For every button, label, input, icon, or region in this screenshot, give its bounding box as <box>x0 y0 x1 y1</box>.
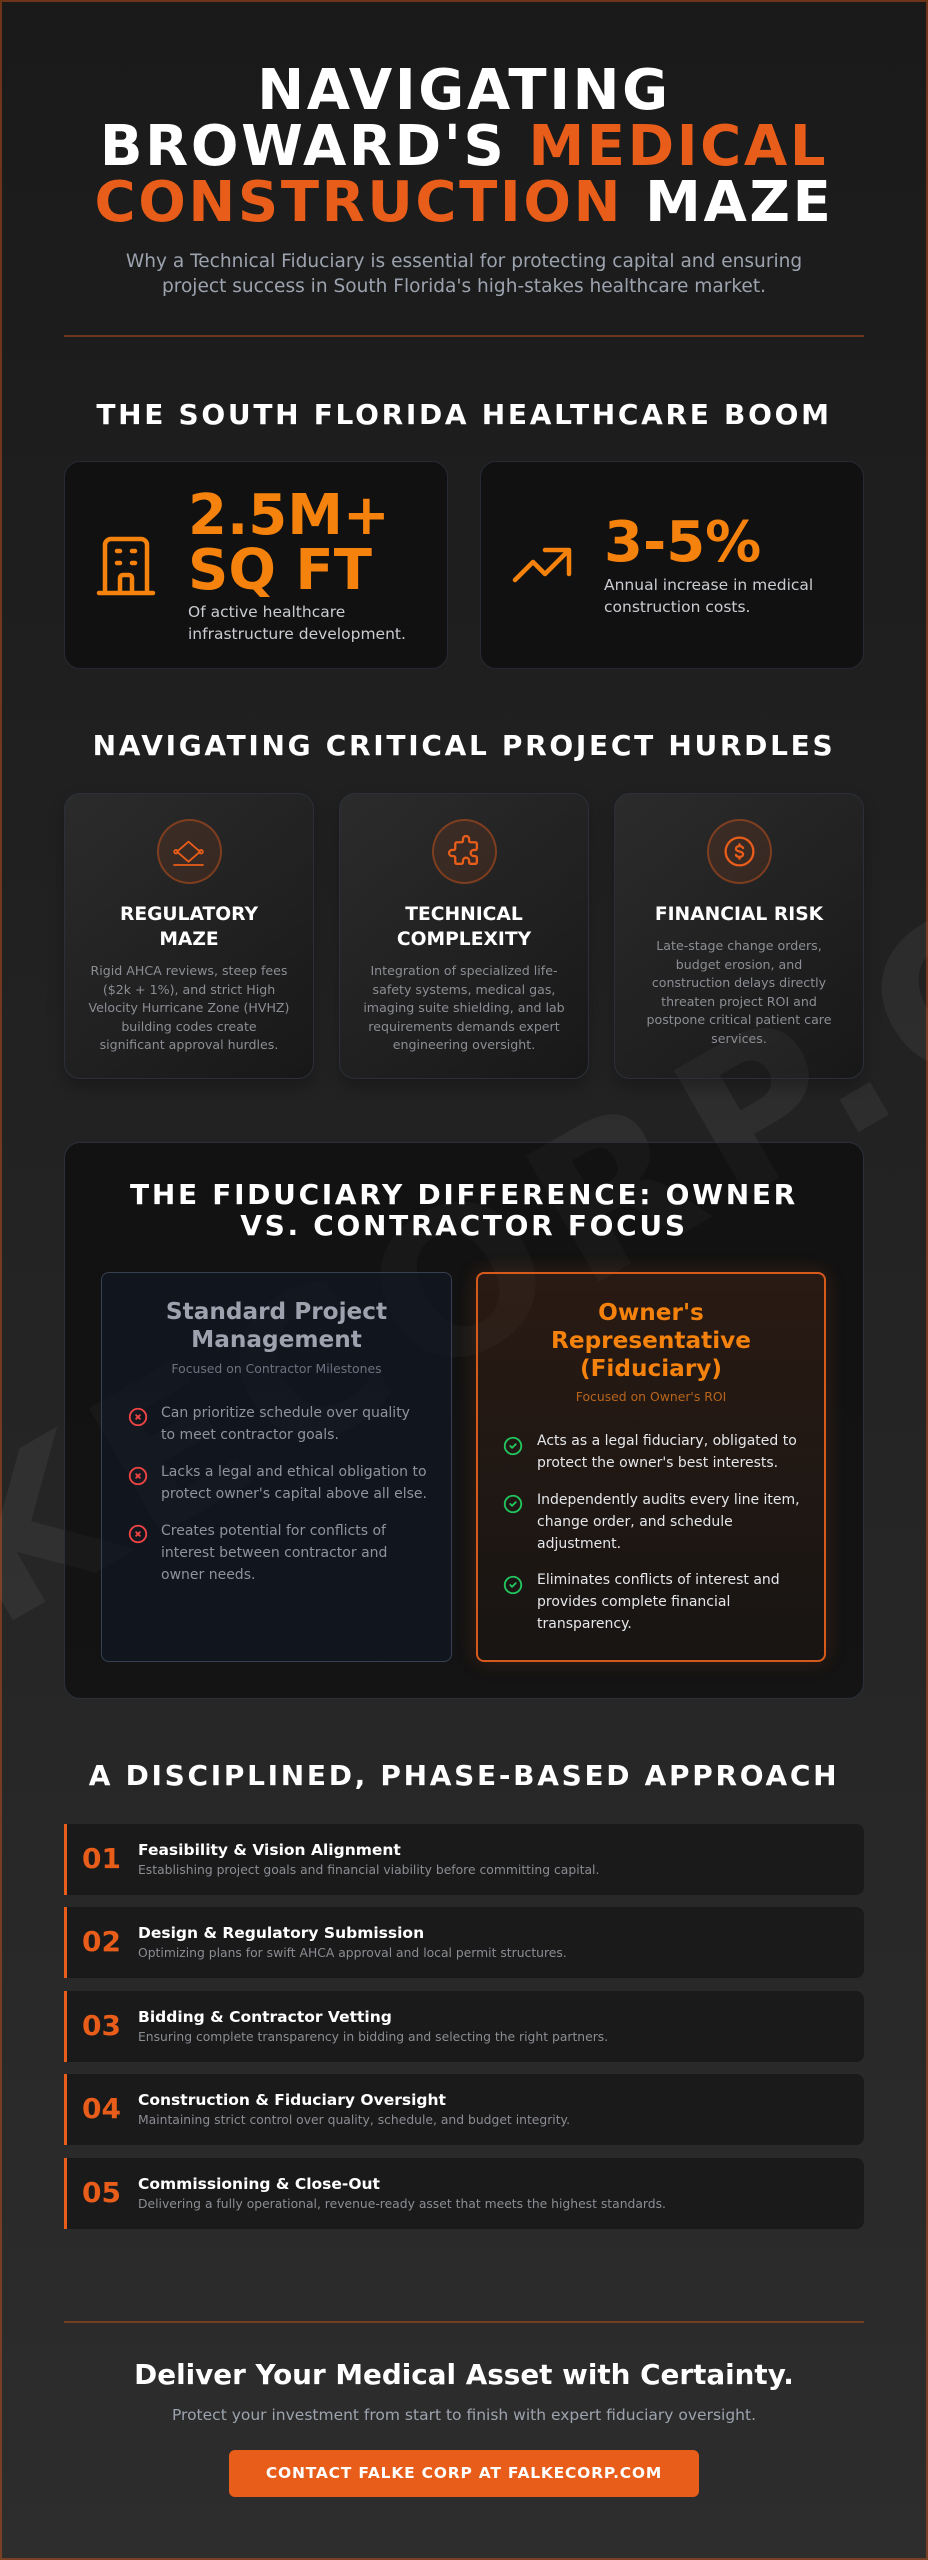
card title: TECHNICAL <box>405 904 523 925</box>
card text: significant approval hurdles. <box>100 1037 278 1052</box>
call to action button: CONTACT FALKE CORP AT FALKECORP.COM <box>266 2464 662 2482</box>
panel: financial risk <box>614 793 864 1079</box>
phase description: Ensuring complete transparency in bidding and selecting the right partners. <box>138 2030 608 2044</box>
list item: Lacks a legal and ethical obligation to <box>161 1464 427 1480</box>
list item <box>161 1464 427 1502</box>
heading: healthcare boom: THE SOUTH FLORIDA HEALTHCARE BOOM <box>96 398 832 431</box>
icon: check <box>504 1436 522 1456</box>
phase number: 01 <box>82 1842 121 1875</box>
card text: services. <box>711 1030 767 1046</box>
phase 2 <box>64 1907 864 1978</box>
stat description: construction costs. <box>604 598 750 616</box>
icon: dollar <box>707 819 772 884</box>
list item <box>161 1405 410 1443</box>
call to action button <box>229 2450 699 2497</box>
column: owner's representative <box>476 1272 826 1662</box>
icon: check <box>504 1494 522 1514</box>
panel: technical complexity <box>339 793 589 1079</box>
list item: adjustment. <box>537 1536 621 1552</box>
icon: x <box>128 1466 148 1486</box>
title: CONSTRUCTION MAZE <box>95 170 833 235</box>
phase number: 03 <box>82 2009 121 2042</box>
title <box>95 58 833 235</box>
card title <box>398 906 532 946</box>
card text: building codes create <box>121 1018 257 1034</box>
phase title: Bidding & Contractor Vetting <box>138 2008 392 2026</box>
list item <box>537 1433 797 1471</box>
stat description <box>188 603 406 643</box>
heading: hurdles: NAVIGATING CRITICAL PROJECT HURDLES <box>93 729 835 762</box>
title: BROWARD'S MEDICAL <box>100 114 828 179</box>
card text <box>88 966 288 1052</box>
list item: Can prioritize schedule over quality <box>161 1405 410 1421</box>
phase title: Construction & Fiduciary Oversight <box>138 2091 446 2109</box>
list item <box>537 1572 780 1632</box>
icon: regulatory <box>157 819 222 884</box>
list item <box>537 1492 800 1552</box>
phase 3 <box>64 1991 864 2062</box>
stat card: cost increase <box>480 461 864 669</box>
phase description: Optimizing plans for swift AHCA approval and local permit structures. <box>138 1946 567 1960</box>
list item: Acts as a legal fiduciary, obligated to <box>537 1433 797 1449</box>
stat value: 2.5M+ <box>188 483 390 548</box>
card text: Rigid AHCA reviews, steep fees <box>91 963 287 978</box>
column title <box>551 1299 751 1382</box>
stat description: infrastructure development. <box>188 625 406 643</box>
card text: requirements demands expert <box>368 1018 560 1034</box>
phase title: Design & Regulatory Submission <box>138 1924 424 1942</box>
icon: check <box>504 1576 522 1594</box>
phase title: Feasibility & Vision Alignment <box>138 1841 401 1859</box>
card text <box>648 940 831 1043</box>
heading: phases: A DISCIPLINED, PHASE-BASED APPROACH <box>89 1759 839 1792</box>
phase 4 <box>64 2074 864 2145</box>
subtitle <box>126 251 802 297</box>
card title: COMPLEXITY <box>397 929 531 950</box>
phase 5 <box>64 2158 864 2229</box>
list item: protect the owner's best interests. <box>537 1455 778 1471</box>
divider <box>64 335 864 337</box>
subtitle: project success in South Florida's high-stakes healthcare market. <box>162 276 766 297</box>
card text <box>364 966 564 1052</box>
panel: regulatory maze <box>64 793 314 1079</box>
stat value <box>188 483 390 603</box>
card text: Late-stage change orders, <box>656 938 822 953</box>
list item: Independently audits every line item, <box>537 1492 800 1508</box>
column title <box>166 1298 387 1353</box>
heading: fiduciary difference <box>130 1178 798 1242</box>
card text: threaten project ROI and <box>661 994 817 1008</box>
subtitle: Why a Technical Fiduciary is essential for protecting capital and ensuring <box>126 251 802 272</box>
list item: protect owner's capital above all else. <box>161 1486 427 1502</box>
column subtitle: Focused on Owner's ROI <box>576 1389 726 1404</box>
heading: fiduciary difference: THE FIDUCIARY DIFFERENCE: OWNER <box>130 1178 798 1211</box>
column title: Management <box>191 1326 362 1353</box>
list item: Creates potential for conflicts of <box>161 1523 386 1539</box>
list item <box>161 1523 387 1583</box>
card title: FINANCIAL RISK <box>655 904 823 925</box>
card text: imaging suite shielding, and lab <box>363 1000 565 1015</box>
phase description: Maintaining strict control over quality, schedule, and budget integrity. <box>138 2113 570 2127</box>
card text: budget erosion, and <box>676 956 802 972</box>
column title: (Fiduciary) <box>580 1355 722 1382</box>
footer divider <box>64 2321 864 2323</box>
list item: owner needs. <box>161 1567 255 1583</box>
phase description: Establishing project goals and financial viability before committing capital. <box>138 1863 599 1877</box>
card text: construction delays directly <box>652 975 826 990</box>
card text: engineering oversight. <box>393 1037 535 1052</box>
card title <box>122 906 258 945</box>
phase number: 04 <box>82 2092 121 2125</box>
footer heading: Deliver Your Medical Asset with Certainty. <box>134 2358 794 2391</box>
stat description: Annual increase in medical <box>604 576 813 594</box>
icon: puzzle <box>432 819 497 884</box>
heading: fiduciary difference: VS. CONTRACTOR FOCUS <box>240 1209 688 1242</box>
phase number: 02 <box>82 1925 121 1958</box>
stat value: SQ FT <box>188 538 372 603</box>
icon: building <box>96 536 156 596</box>
list item: provides complete financial <box>537 1594 730 1610</box>
list item: transparency. <box>537 1616 632 1632</box>
phase 1 <box>64 1824 864 1895</box>
list item: interest between contractor and <box>161 1545 387 1561</box>
stat value: 3-5% <box>604 510 761 575</box>
phase description: Delivering a fully operational, revenue-ready asset that meets the highest standards. <box>138 2197 666 2211</box>
icon: x <box>128 1524 148 1544</box>
card text: safety systems, medical gas, <box>373 982 555 996</box>
card text: Integration of specialized life- <box>370 963 558 978</box>
footer text: Protect your investment from start to finish with expert fiduciary oversight. <box>172 2406 756 2424</box>
card text: Velocity Hurricane Zone (HVHZ) <box>89 1000 289 1015</box>
stat description: Of active healthcare <box>188 603 345 621</box>
column: standard project management <box>101 1272 452 1662</box>
panel: fiduciary difference <box>64 1142 864 1699</box>
icon: trending up <box>512 548 572 582</box>
list item: change order, and schedule <box>537 1514 733 1530</box>
list item: to meet contractor goals. <box>161 1427 339 1443</box>
column title: Owner's <box>598 1299 704 1326</box>
list item: Eliminates conflicts of interest and <box>537 1572 780 1588</box>
card title: REGULATORY <box>120 904 258 925</box>
column subtitle: Focused on Contractor Milestones <box>171 1361 382 1376</box>
column title: Representative <box>551 1327 751 1354</box>
phase title: Commissioning & Close-Out <box>138 2175 380 2193</box>
icon: x <box>128 1408 148 1426</box>
column title: Standard Project <box>166 1298 387 1325</box>
card title: MAZE <box>159 929 219 950</box>
stat card: square feet <box>64 461 448 669</box>
stat description <box>604 576 813 616</box>
title: NAVIGATING <box>257 58 671 123</box>
card text: postpone critical patient care <box>647 1012 831 1027</box>
phase number: 05 <box>82 2176 121 2209</box>
card text: ($2k + 1%), and strict High <box>103 982 275 996</box>
